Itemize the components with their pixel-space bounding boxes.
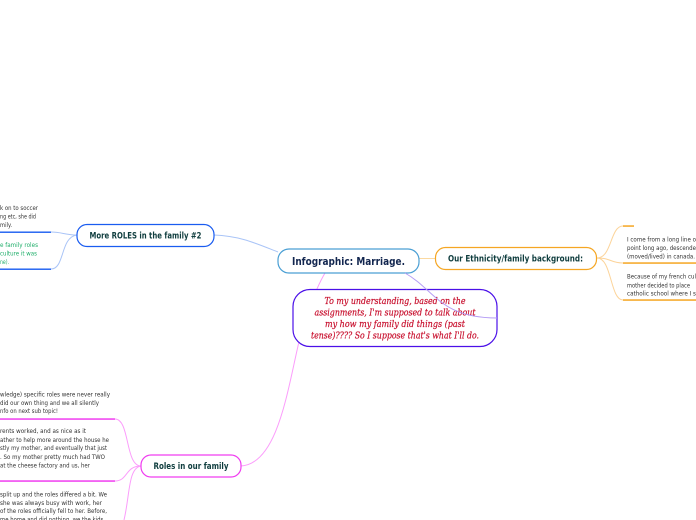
branch connector: central to more roles bbox=[214, 235, 278, 252]
text block: roles second note bbox=[0, 428, 109, 470]
connectors: roles children bbox=[115, 419, 141, 520]
text block: more roles green note bbox=[0, 242, 38, 266]
node: roles in our family: Roles in our family bbox=[154, 462, 229, 472]
connectors: more roles children bbox=[51, 232, 77, 269]
underline: ethnicity first note bbox=[623, 262, 696, 264]
text block: roles first note: did our own thing and we all silently bbox=[0, 400, 99, 407]
text block: roles first note: nfo on next sub topic! bbox=[0, 408, 58, 415]
text block: roles first note: wledge) specific roles were never really bbox=[0, 392, 110, 398]
text block: roles second note: ather to help more around the house he bbox=[0, 437, 109, 444]
callout: assignment note: tense)???? So I suppose that's what I'll do. bbox=[311, 330, 479, 342]
underline: roles first note bbox=[0, 418, 115, 420]
text block: roles second note: at the cheese factory and us, her bbox=[0, 462, 90, 470]
text block: roles second note: rents worked, and as nice as it bbox=[0, 428, 87, 435]
node: more roles: More ROLES in the family #2 bbox=[90, 232, 202, 242]
text block: roles second note: . So my mother pretty much had TWO bbox=[0, 454, 105, 461]
text block: more roles first note: mily. bbox=[0, 222, 12, 229]
node: roles in our family bbox=[141, 455, 241, 477]
text block: roles first note bbox=[0, 392, 110, 415]
text block: ethnicity second note bbox=[627, 274, 696, 298]
branch connector: central to ethnicity bbox=[419, 258, 435, 260]
text block: more roles first note: ng etc, she did bbox=[0, 214, 36, 220]
text block: more roles green note: e family roles bbox=[0, 242, 38, 249]
text block: roles third note: she was always busy with work, her bbox=[0, 500, 102, 507]
underline: more roles green note bbox=[0, 268, 51, 270]
text block: more roles first note bbox=[0, 205, 38, 229]
underline: ethnicity empty topic bbox=[623, 225, 634, 227]
connectors: ethnicity children bbox=[597, 226, 623, 300]
node: central topic: Infographic: Marriage. bbox=[292, 256, 405, 268]
node: central topic bbox=[278, 249, 419, 273]
node: more roles bbox=[77, 224, 214, 246]
underline: ethnicity second note bbox=[623, 299, 696, 301]
callout: assignment note: To my understanding, based on the bbox=[324, 296, 466, 307]
text block: roles third note: split up and the roles differed a bit. We bbox=[0, 492, 107, 498]
text block: more roles first note: k on to soccer bbox=[0, 205, 38, 212]
text block: ethnicity first note bbox=[627, 236, 696, 260]
branch connector: central to roles bbox=[241, 273, 325, 466]
text block: roles third note: of the roles officially fell to her. Before, bbox=[0, 508, 107, 515]
callout: assignment note: my how my family did things (past bbox=[325, 319, 465, 330]
callout: assignment note: assignments, I'm supposed to talk about bbox=[314, 308, 476, 318]
text block: more roles green note: ne). bbox=[0, 259, 9, 266]
node: ethnicity: Our Ethnicity/family background: bbox=[448, 254, 583, 264]
branch connector: central to note bbox=[405, 273, 497, 318]
underline: roles second note bbox=[0, 480, 115, 482]
text block: more roles green note: culture it was bbox=[0, 250, 37, 258]
node: ethnicity bbox=[436, 248, 596, 270]
text block: roles third note bbox=[0, 492, 107, 520]
callout: assignment note bbox=[293, 290, 497, 346]
text block: roles second note: stly my mother, and eventually that just bbox=[0, 445, 107, 452]
underline: more roles first note bbox=[0, 232, 51, 233]
